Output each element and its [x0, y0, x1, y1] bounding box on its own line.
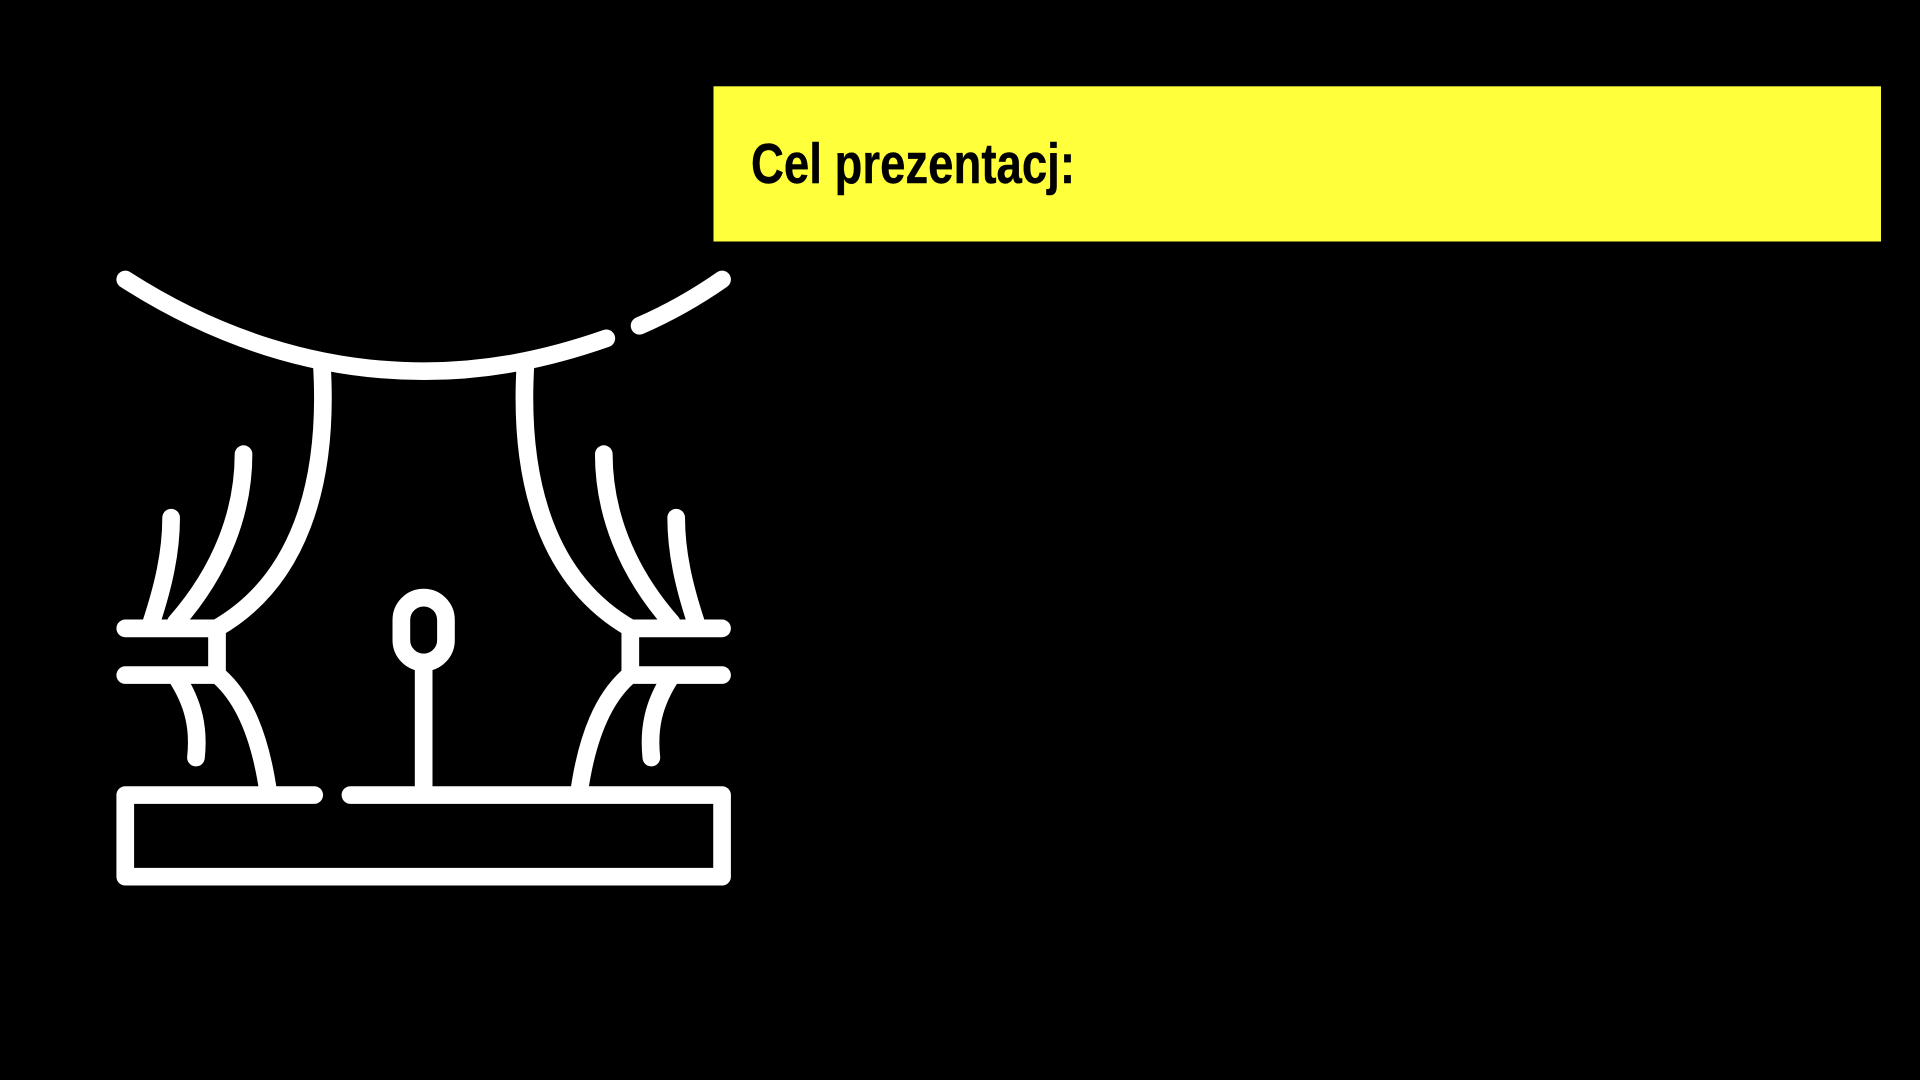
right curtain: [524, 364, 722, 793]
microphone: [401, 598, 446, 795]
icon: theatre stage with curtains and microphone: [125, 279, 722, 877]
stage platform: [125, 795, 722, 877]
valance: long top arc: [125, 279, 606, 371]
heading: Cel prezentacj: Cel prezentacj:: [751, 132, 1075, 196]
panel: yellow heading banner: [714, 86, 1881, 242]
valance: short top arc segment: [640, 279, 722, 326]
left curtain: [125, 364, 323, 793]
